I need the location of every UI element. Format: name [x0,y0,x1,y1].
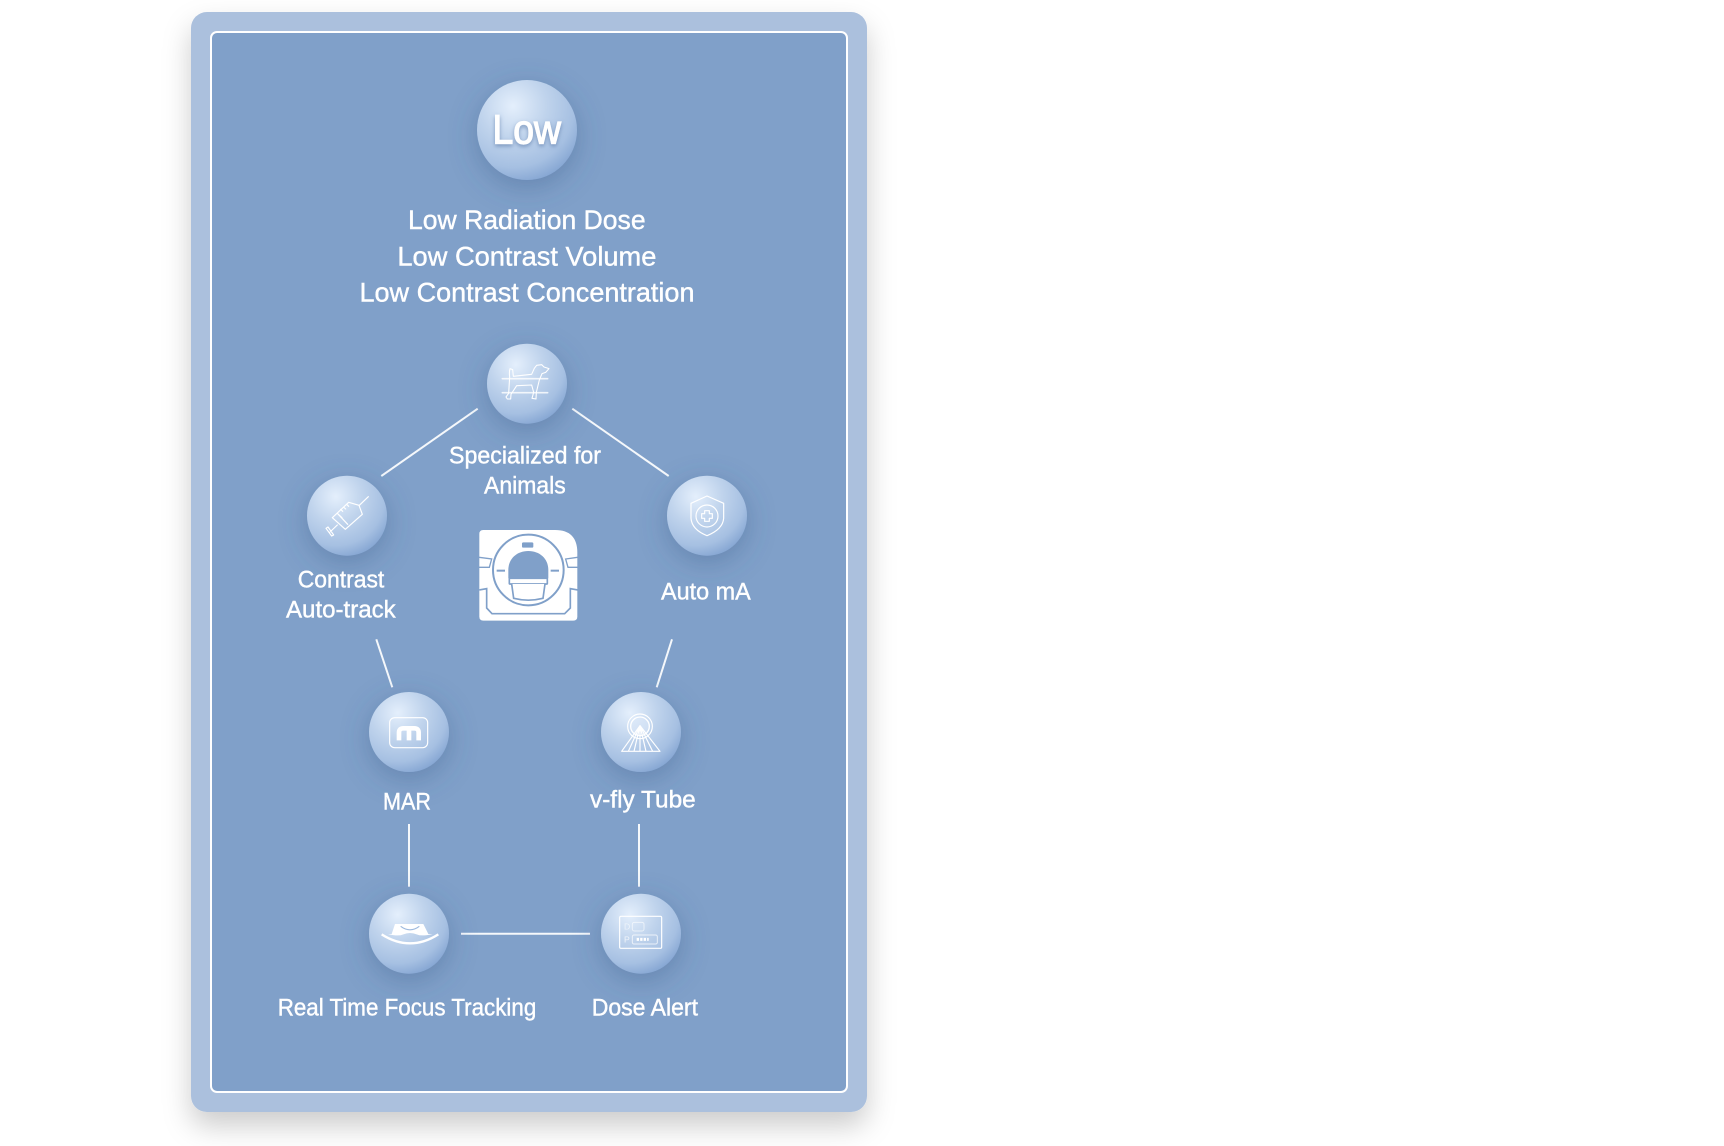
icon: dose panel: P [624,935,630,945]
node: MAR: MAR [383,789,431,816]
icon: dog on table [502,365,549,399]
node: Contrast Auto-track [286,476,397,623]
node: Specialized for Animals: Specialized for [449,442,601,469]
node: Real Time Focus Tracking: Real Time Focus Tracking [278,995,536,1022]
node: Contrast Auto-track: Contrast [298,567,385,594]
node: MAR [369,692,449,816]
node: v-fly Tube [590,692,696,814]
node: Real Time Focus Tracking [278,894,536,1022]
node: Specialized for Animals [449,344,601,499]
icon: tube with beam [622,714,660,751]
icon: shield with plus [691,496,724,536]
connector lines [376,409,672,934]
node: v-fly Tube: v-fly Tube [590,787,696,814]
badge: Low: Low [492,106,561,152]
icon: syringe [326,497,368,536]
badge: Low [477,80,577,180]
heading: low benefits: Low Contrast Volume [397,242,656,272]
node: Auto mA: Auto mA [661,578,751,605]
heading: low benefits: Low Radiation Dose [408,205,646,235]
node: Dose Alert [592,894,698,1022]
icon: patient table [382,924,438,943]
panel: inner frame [211,32,847,1092]
node: Dose Alert: Dose Alert [592,995,698,1022]
icon: MAR logo [390,718,428,748]
icon: CT scanner [479,530,578,621]
node: Auto mA [661,476,751,605]
heading: low benefits [360,205,694,308]
icon: dose panel: D [624,922,630,932]
heading: low benefits: Low Contrast Concentration [360,278,694,308]
node: Contrast Auto-track: Auto-track [286,596,397,623]
node: Specialized for Animals: Animals [484,472,566,499]
panel: outer frame [191,12,867,1112]
icon: dose panel [620,916,662,948]
